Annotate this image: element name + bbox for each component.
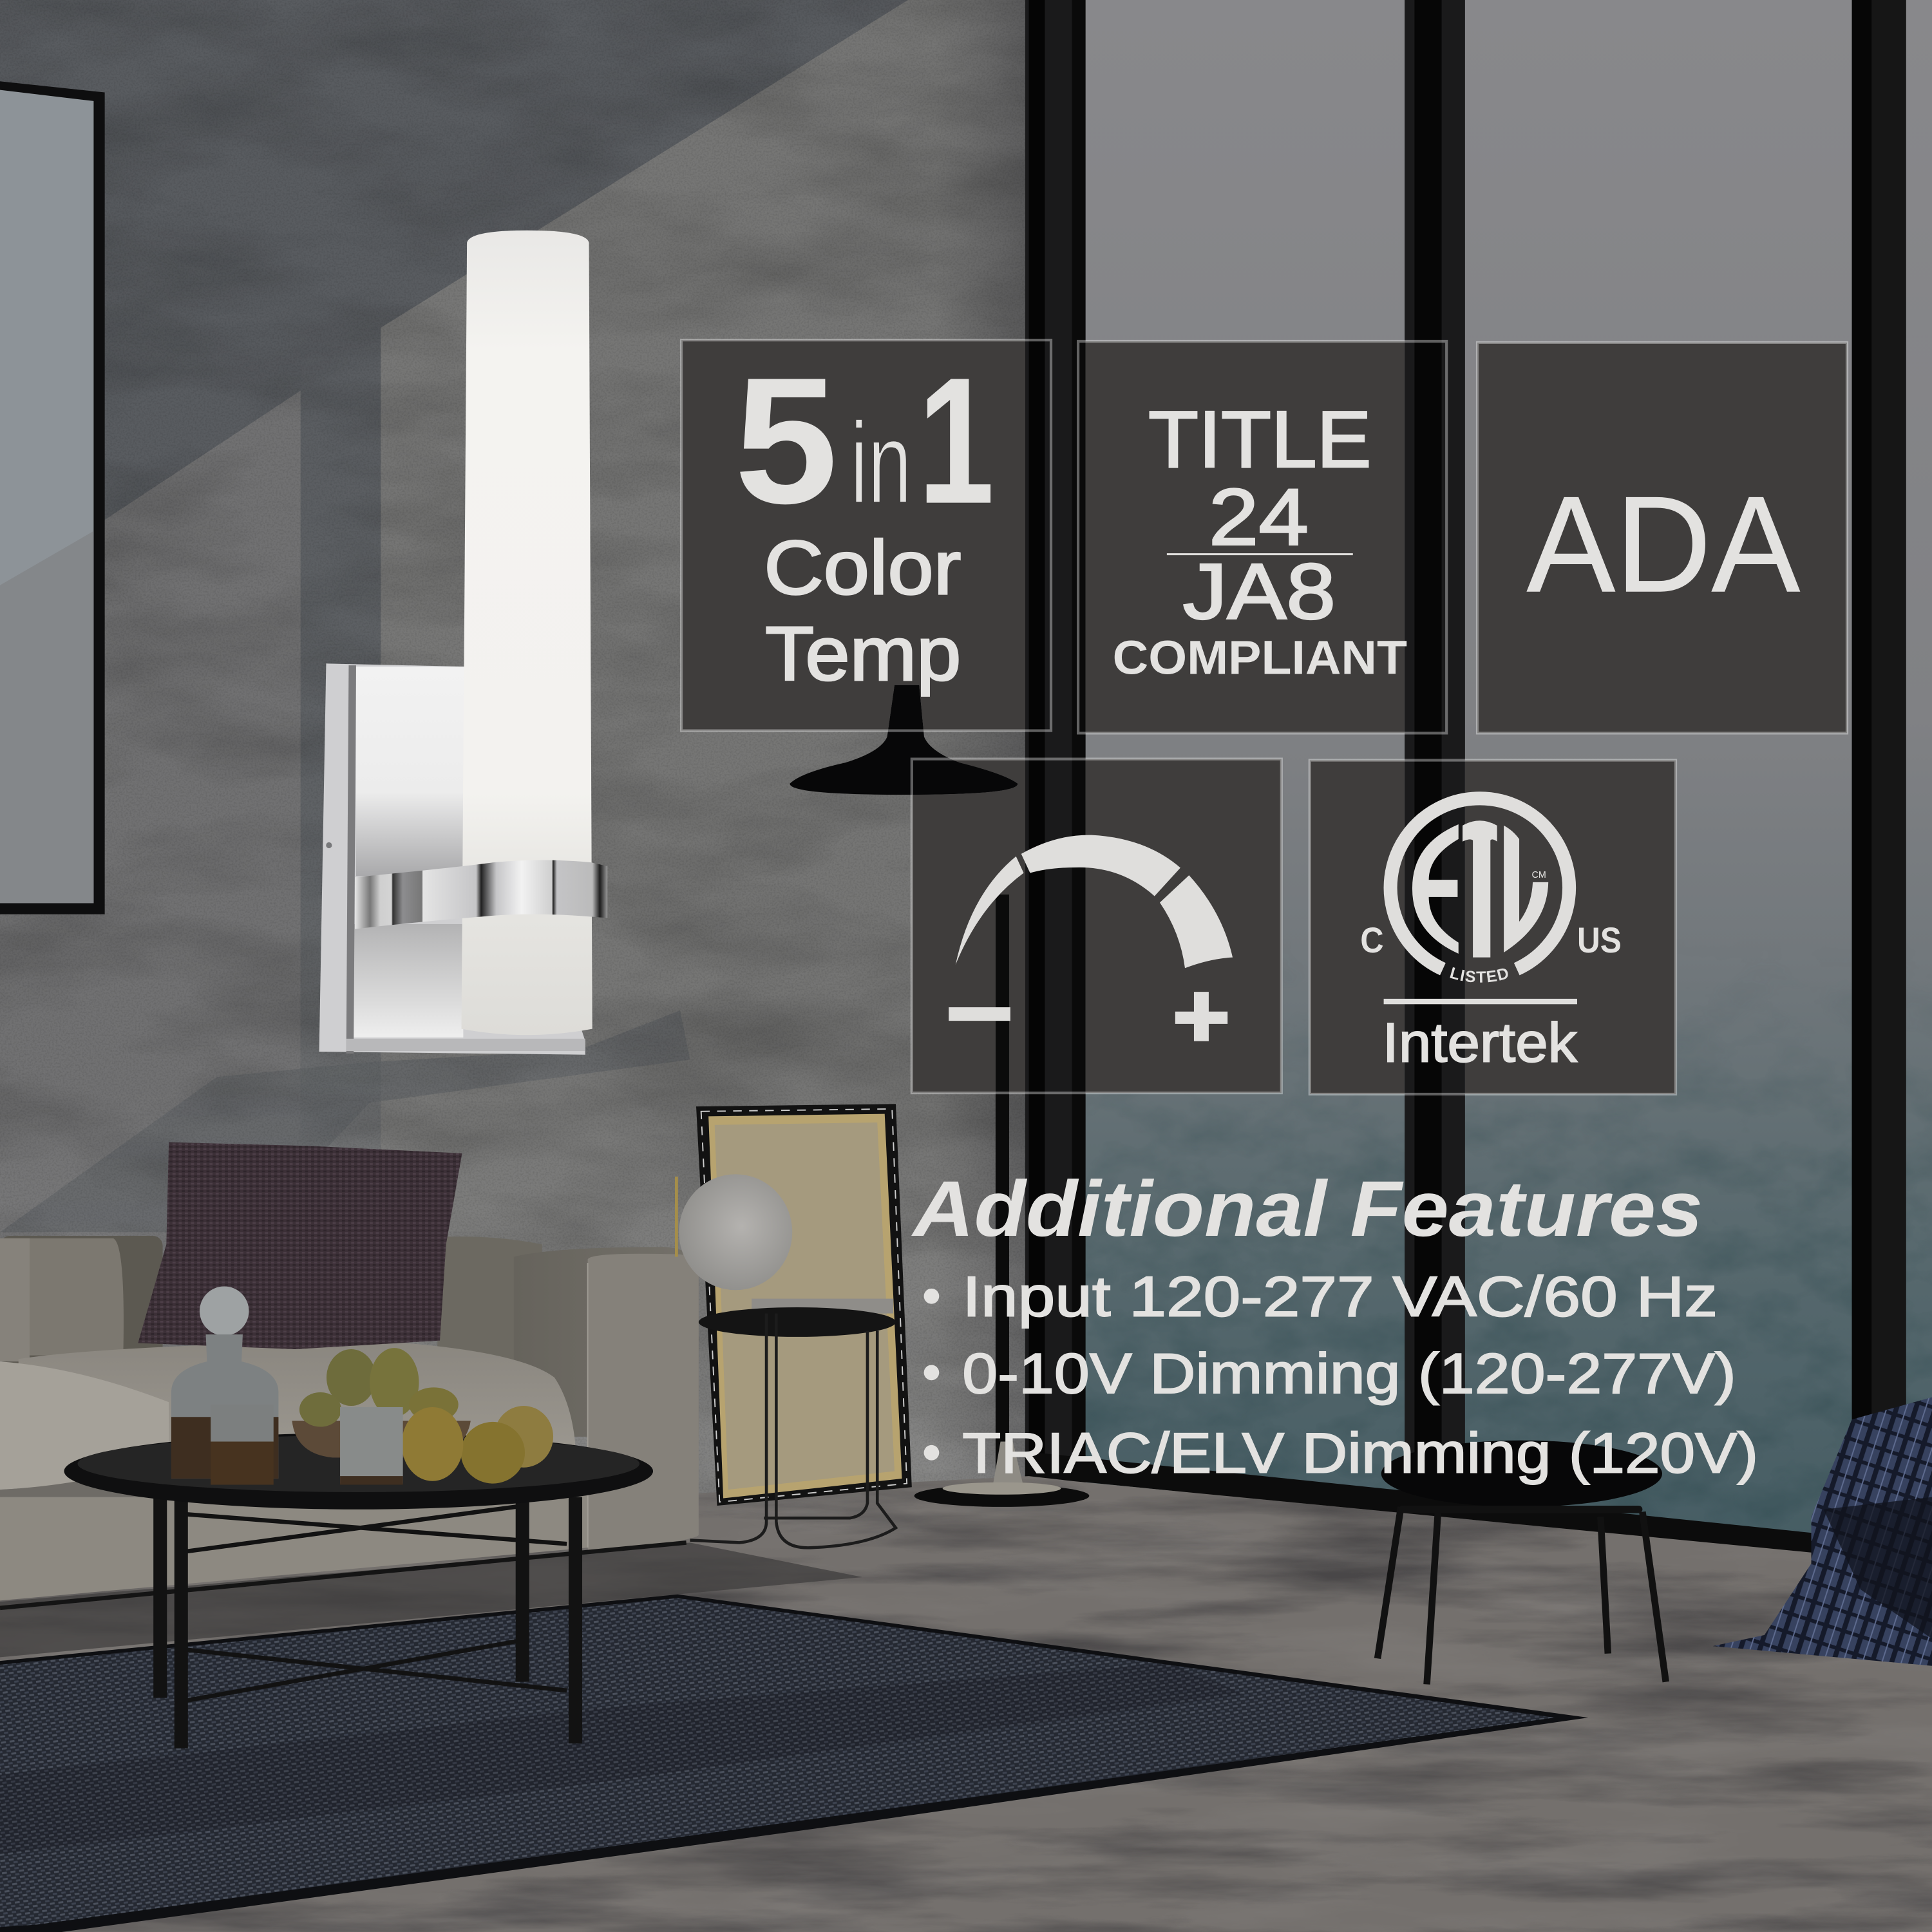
stool [1378, 1441, 1666, 1684]
Intertek wordmark: Intertek [1383, 1012, 1578, 1074]
letter c: C [1360, 920, 1384, 960]
bullet one: Input 120-277 VAC/60 Hz [962, 1264, 1718, 1328]
word temp: Temp [765, 612, 961, 697]
framed poster [0, 81, 105, 914]
bullet two: 0-10V Dimming (120-277V) [962, 1341, 1736, 1405]
icon: ETL mark: LISTED [1450, 967, 1508, 983]
word color: Color [764, 526, 961, 611]
sofa [0, 1236, 699, 1608]
JA8 text: JA8 [1183, 547, 1336, 635]
sconce backplate [319, 663, 585, 1055]
globe table lamp [676, 1174, 792, 1290]
additional features block [911, 1164, 1758, 1484]
big number 1: 1 [918, 341, 994, 542]
divider line [1384, 999, 1577, 1004]
fraction line [1167, 553, 1353, 555]
glass tube shade [462, 231, 592, 1035]
icon: ETL mark: CM [1532, 870, 1546, 880]
heading: Additional Features [911, 1164, 1703, 1253]
plaid blanket [1712, 1397, 1932, 1666]
area rug [0, 1595, 1588, 1932]
wall sconce product [319, 231, 607, 1055]
panel: title 24 JA8 compliant [1078, 341, 1446, 733]
number 24: 24 [1209, 473, 1309, 562]
panel: ADA [1477, 343, 1847, 733]
panel: ETL listed Intertek [1309, 759, 1677, 1096]
window glass and mullions [1025, 0, 1932, 1602]
side table with books [690, 1299, 896, 1548]
big number 5: 5 [734, 341, 838, 542]
panel: 5 in 1 color temp [681, 340, 1051, 731]
purple pillow [138, 1142, 462, 1349]
panel: dimmable icon [912, 759, 1282, 1093]
compliant text: COMPLIANT [1113, 630, 1407, 685]
word in: in [850, 399, 912, 528]
concrete wall [0, 0, 1032, 1553]
icon: dimmer arc [956, 835, 1233, 968]
icon: minus [949, 1007, 1010, 1021]
floor lamp [790, 685, 1089, 1507]
coffee table with decanter and fruit [64, 1286, 653, 1748]
chrome ring band [355, 860, 607, 929]
icon: plus [1175, 992, 1227, 1041]
concrete floor [0, 1466, 1932, 1932]
ADA text: ADA [1527, 468, 1801, 621]
title text: TITLE [1148, 395, 1371, 484]
leaning canvas [696, 1104, 912, 1506]
icon: ETL mark [1383, 791, 1577, 983]
letters us: US [1577, 920, 1622, 960]
bullet three: TRIAC/ELV Dimming (120V) [962, 1421, 1758, 1484]
